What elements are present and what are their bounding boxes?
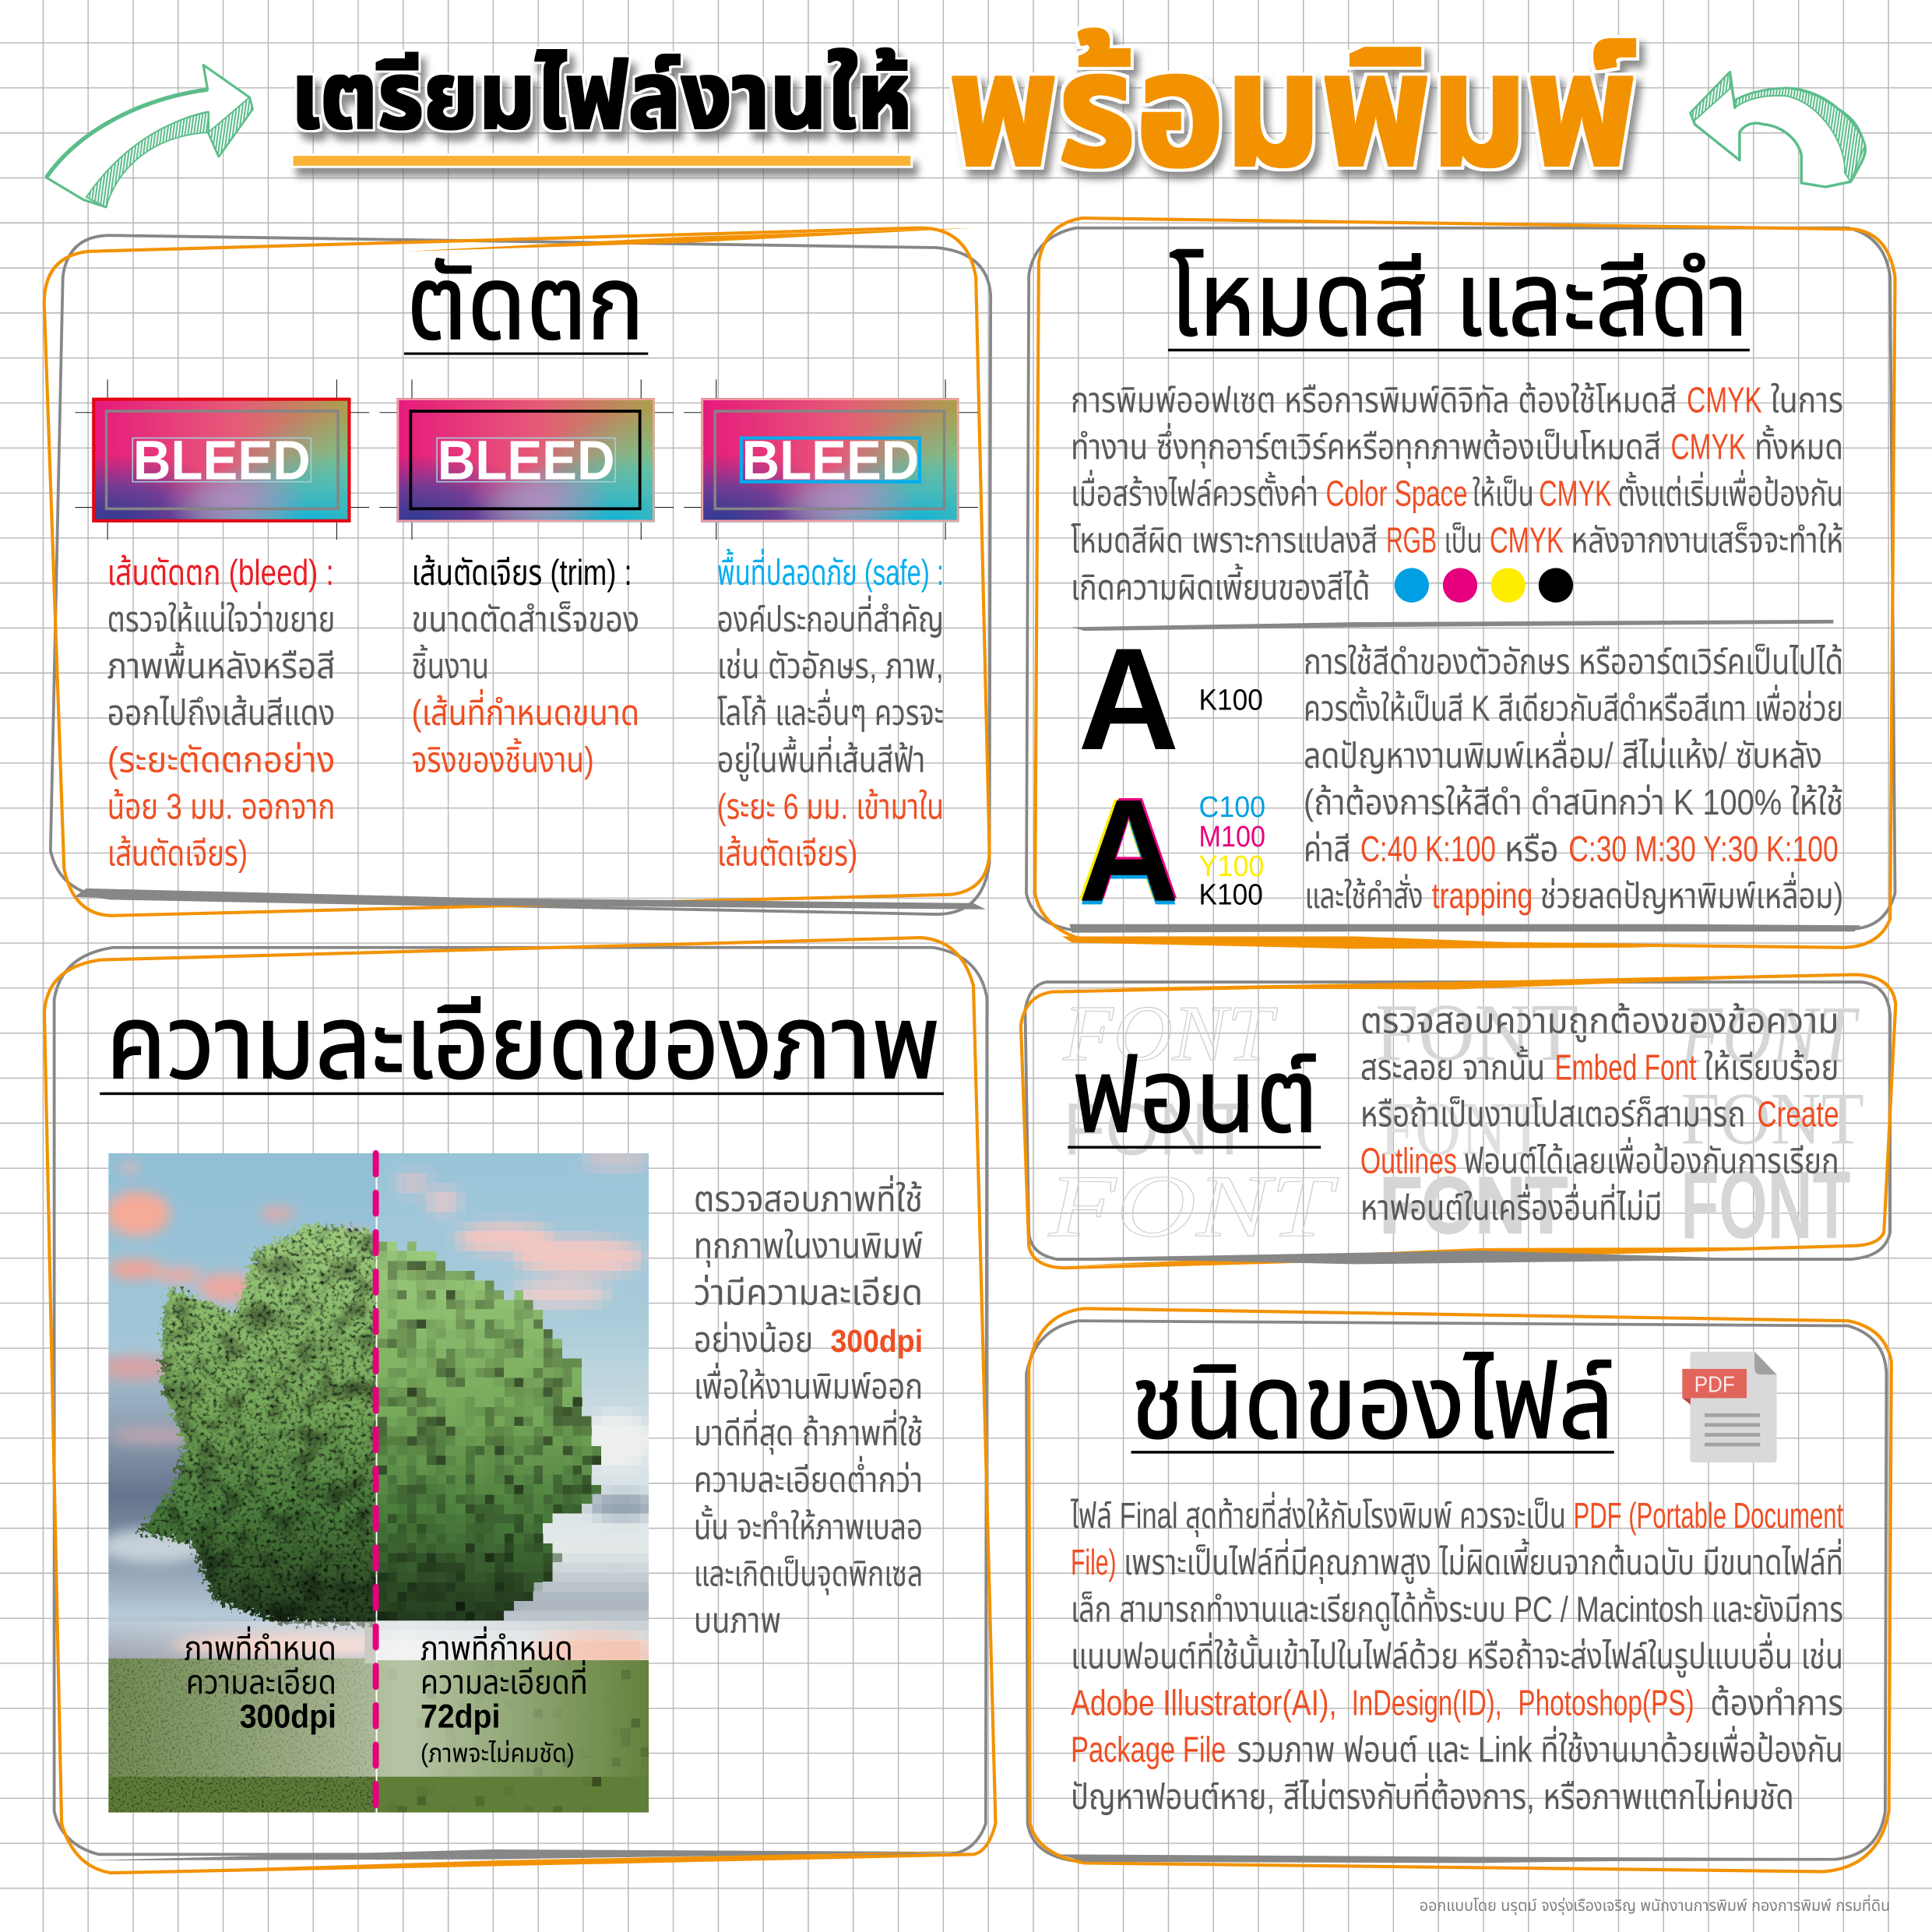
text: safe column	[717, 548, 944, 874]
text: colour mode paragraph: ทั้งหมด	[1754, 424, 1843, 466]
text: trim column: ชิ้นงาน	[411, 644, 489, 686]
decorative FONT specimens: FONT	[1680, 990, 1860, 1080]
text: resolution paragraph: ทุกภาพในงานพิมพ์	[694, 1225, 923, 1267]
caption: 72dpi: (ภาพจะไม่คมชัด)	[421, 1739, 575, 1768]
caption overlay band	[108, 1621, 649, 1777]
decorative FONT specimens: FONT	[1047, 1156, 1339, 1255]
text: file type paragraph: ปัญหาฟอนต์หาย, สีไม่ตรงกับที่ต้องการ, หรือภาพแตกไม่คมชัด	[1071, 1772, 1794, 1817]
title highlight: ready to print: พร้อมพิมพ์	[948, 20, 1636, 199]
text: bleed column: ตรวจให้แน่ใจว่าขยาย	[107, 599, 335, 639]
decorative FONT specimens	[1047, 987, 1864, 1259]
text: resolution paragraph: ความละเอียดต่ำกว่า	[694, 1455, 923, 1500]
caption: 72dpi: 72dpi	[421, 1698, 500, 1735]
panel: colour mode	[1026, 218, 1895, 948]
text: colour mode paragraph: การพิมพ์ออฟเซต หรือการพิมพ์ดิจิทัล ต้องใช้โหมดสี	[1071, 379, 1677, 420]
text: safe column: (ระยะ 6 มม. เข้ามาใน	[717, 786, 944, 826]
image half: sharp 300dpi	[99, 1153, 394, 1813]
text: colour mode paragraph: CMYK	[1490, 520, 1564, 561]
sample: CMYK rich black letter: A	[1078, 769, 1179, 932]
text: font paragraph: Embed Font	[1555, 1047, 1697, 1088]
panel frame	[1021, 975, 1895, 1268]
heading: ความละเอียดของภาพ	[106, 985, 940, 1100]
text: colour mode paragraph: ในการ	[1771, 379, 1843, 420]
text: bleed column: ออกไปถึงเส้นสีแดง	[107, 692, 335, 733]
icon: CMYK dots	[1395, 568, 1573, 603]
heading underline	[100, 1093, 944, 1095]
text: black ink paragraph: และใช้คำสั่ง	[1305, 874, 1423, 916]
text: colour mode paragraph: ให้เป็น	[1473, 473, 1534, 514]
text: file type paragraph: Adobe Illustrator(AI),	[1071, 1683, 1337, 1723]
text: bleed column: เส้นตัดเจียร)	[107, 833, 248, 874]
bleed card: trim line: BLEED	[438, 431, 615, 492]
text: trim column	[411, 552, 639, 779]
footer credit: ออกแบบโดย นรุตม์ จงรุ่งเรืองเจริญ พนักงานการพิมพ์ กองการพิมพ์ กรมที่ดิน	[1420, 1895, 1890, 1916]
decorative FONT specimens: FONT	[1380, 1161, 1568, 1249]
text: resolution paragraph: อย่างน้อย	[694, 1319, 813, 1360]
text: bleed column: (ระยะตัดตกอย่าง	[107, 739, 335, 779]
text: safe column: โลโก้ และอื่นๆ ควรจะ	[717, 688, 944, 733]
panel: fonts	[1021, 975, 1895, 1268]
panel frame	[44, 228, 991, 916]
icon: PDF file: PDF	[1694, 1372, 1735, 1397]
text: font paragraph: ให้เรียบร้อย	[1704, 1047, 1839, 1088]
text: black ink paragraph: (ถ้าต้องการให้สีดำ ดำสนิทกว่า K 100% ให้ใช้	[1304, 782, 1843, 822]
heading: ชนิดของไฟล์	[1131, 1346, 1614, 1461]
heading underline	[404, 353, 648, 355]
text: file type paragraph: File)	[1071, 1542, 1117, 1582]
heading underline	[1131, 1451, 1614, 1454]
text: resolution paragraph: นั้น จะทำให้ภาพเบลอ	[694, 1504, 923, 1547]
decorative FONT specimens: FONT	[1063, 1089, 1251, 1171]
text: trim column: ขนาดตัดสำเร็จของ	[411, 599, 639, 639]
sample: CMYK rich black letter: Y100	[1199, 850, 1264, 883]
text: colour mode paragraph: CMYK	[1671, 426, 1746, 466]
text: black ink paragraph: C:30 M:30 Y:30 K:100	[1568, 829, 1839, 869]
text: resolution paragraph: เพื่อให้งานพิมพ์ออก	[694, 1362, 923, 1406]
text: font paragraph: หรือถ้าเป็นงานโปสเตอร์ก็สามารถ	[1360, 1094, 1746, 1135]
text: black ink paragraph: ลดปัญหางานพิมพ์เหลื่อม/ สีไม่แห้ง/ ซับหลัง	[1304, 731, 1822, 776]
text: bleed column: ภาพพื้นหลังหรือสี	[107, 642, 335, 686]
text: font paragraph: หาฟอนต์ในเครื่องอื่นที่ไม่มี	[1360, 1183, 1662, 1227]
text: colour mode paragraph: เป็น	[1444, 520, 1482, 561]
text: file type paragraph	[1070, 1491, 1843, 1817]
caption: 300dpi: ความละเอียด	[186, 1664, 336, 1701]
heading: ตัดตก	[406, 246, 645, 361]
panel frame	[44, 938, 995, 1873]
text: colour mode paragraph: ทำงาน ซึ่งทุกอาร์ตเวิร์คหรือทุกภาพต้องเป็นโหมดสี	[1071, 422, 1661, 468]
image half: pixelated 72dpi	[364, 1146, 656, 1818]
bleed card: red line: BLEED	[133, 431, 311, 492]
heading: โหมดสี และสีดำ	[1170, 242, 1748, 357]
text: trim column: เส้นตัดเจียร (trim) :	[411, 552, 632, 593]
panel frame	[1026, 1308, 1892, 1871]
text: black ink paragraph: ค่าสี	[1304, 829, 1350, 869]
sample: CMYK rich black letter: A	[1078, 772, 1179, 935]
text: file type paragraph: InDesign(ID),	[1352, 1683, 1502, 1723]
text: colour mode paragraph: CMYK	[1687, 379, 1762, 420]
text: safe column: พื้นที่ปลอดภัย (safe) :	[717, 548, 944, 593]
text: font paragraph: ตรวจสอบความถูกต้องของข้อความ	[1360, 1001, 1839, 1043]
divider brush	[1072, 620, 1833, 631]
decorative FONT specimens: FONT	[1680, 1077, 1864, 1160]
text: font paragraph	[1360, 1001, 1839, 1227]
text: file type paragraph: ไฟล์ Final สุดท้ายที่ส่งให้กับโรงพิมพ์ ควรจะเป็น	[1070, 1491, 1566, 1537]
caption: 72dpi: ความละเอียดที่	[421, 1659, 588, 1701]
image: sharp and pixelated tree comparison	[99, 1146, 656, 1818]
text: colour mode paragraph: เกิดความผิดเพี้ยนของสีได้	[1071, 563, 1370, 607]
text: colour mode paragraph: Color Space	[1326, 473, 1467, 514]
panel: image resolution	[44, 938, 995, 1873]
bleed card: red line	[76, 379, 369, 540]
sample: CMYK rich black letter: M100	[1199, 821, 1265, 853]
text: resolution paragraph: และเกิดเป็นจุดพิกเซล	[694, 1553, 923, 1595]
sample: CMYK rich black letter: K100	[1199, 878, 1263, 911]
text: font paragraph: Outlines	[1360, 1140, 1457, 1181]
text: resolution paragraph: 300dpi	[830, 1323, 923, 1359]
bleed card: safe line: BLEED	[742, 431, 919, 492]
heading underline	[1068, 1146, 1321, 1149]
text: file type paragraph: Package File	[1071, 1730, 1226, 1770]
caption: 72dpi	[421, 1625, 588, 1768]
panel: bleed	[44, 228, 991, 916]
title	[290, 20, 1636, 199]
bleed card: trim line	[379, 379, 674, 540]
decorative FONT specimens: FONT	[1062, 990, 1278, 1077]
dashed divider	[374, 1153, 378, 1814]
sample: K100 letter	[1078, 618, 1263, 780]
text: font paragraph: ฟอนต์ได้เลยเพื่อป้องกันการเรียก	[1464, 1136, 1839, 1181]
text: black ink paragraph: ช่วยลดปัญหาพิมพ์เหลื่อม)	[1540, 871, 1843, 916]
text: resolution paragraph: ตรวจสอบภาพที่ใช้	[694, 1174, 923, 1219]
text: colour mode paragraph: หลังจากงานเสร็จจะทำให้	[1571, 520, 1843, 561]
text: bleed column: เส้นตัดตก (bleed) :	[107, 552, 334, 593]
text: black ink paragraph: trapping	[1432, 875, 1533, 916]
icon: left green arrow	[46, 65, 252, 207]
text: safe column: เช่น ตัวอักษร, ภาพ,	[717, 646, 944, 686]
text: black ink paragraph: หรือ	[1504, 829, 1559, 869]
decorative FONT specimens: FONT	[1380, 1088, 1545, 1172]
title underline	[294, 156, 910, 166]
sample: K100 letter: K100	[1199, 684, 1263, 716]
decorative FONT specimens: FONT	[1375, 987, 1578, 1078]
caption: 72dpi: ภาพที่กำหนด	[421, 1625, 573, 1667]
text: black ink paragraph: C:40 K:100	[1360, 829, 1496, 869]
text: colour mode paragraph: RGB	[1386, 520, 1437, 561]
text: colour mode paragraph: เมื่อสร้างไฟล์ควรตั้งค่า	[1071, 470, 1318, 514]
title line: prepare file: เตรียมไฟล์งานให้	[290, 44, 912, 149]
text: colour mode paragraph: ตั้งแต่เริ่มเพื่อป้องกัน	[1618, 470, 1843, 514]
panel frame	[1026, 218, 1895, 948]
text: safe column: อยู่ในพื้นที่เส้นสีฟ้า	[717, 735, 925, 781]
text: colour mode paragraph: โหมดสีผิด เพราะการแปลงสี	[1071, 520, 1378, 561]
text: trim column: (เส้นที่กำหนดขนาด	[411, 688, 639, 733]
sample: CMYK rich black letter: C100	[1199, 791, 1265, 824]
text: font paragraph: สระลอย จากนั้น	[1360, 1045, 1545, 1088]
text: resolution paragraph: บนภาพ	[694, 1600, 781, 1641]
panel: file type	[1026, 1308, 1892, 1871]
sample: CMYK rich black letter	[1075, 766, 1265, 935]
text: colour mode paragraph: CMYK	[1539, 473, 1612, 514]
text: trim column: จริงของชิ้นงาน)	[411, 737, 594, 779]
text: bleed column	[107, 552, 335, 874]
text: resolution paragraph: ว่ามีความละเอียด	[694, 1272, 923, 1313]
text: resolution paragraph: มาดีที่สุด ถ้าภาพที่ใช้	[694, 1409, 923, 1455]
heading underline	[1168, 349, 1750, 351]
caption: 300dpi	[185, 1625, 336, 1735]
text: safe column: องค์ประกอบที่สำคัญ	[717, 595, 944, 639]
bleed card: safe line	[684, 379, 978, 540]
sample: K100 letter: A	[1078, 618, 1179, 780]
caption: 300dpi: ภาพที่กำหนด	[185, 1625, 336, 1667]
text: bleed column: น้อย 3 มม. ออกจาก	[107, 786, 335, 826]
sample: CMYK rich black letter: A	[1075, 768, 1177, 931]
caption: 300dpi: 300dpi	[240, 1698, 336, 1735]
text: black ink paragraph	[1304, 642, 1843, 916]
text: safe column: เส้นตัดเจียร)	[717, 833, 857, 874]
text: file type paragraph: Photoshop(PS)	[1518, 1683, 1694, 1723]
text: resolution paragraph	[694, 1174, 923, 1641]
heading: ฟอนต์	[1072, 1039, 1318, 1154]
text: font paragraph: Create	[1757, 1094, 1839, 1135]
sample: CMYK rich black letter: A	[1081, 766, 1181, 929]
icon: PDF file	[1682, 1352, 1777, 1462]
text: colour mode paragraph	[1071, 379, 1843, 607]
icon: right green arrow	[1691, 72, 1865, 187]
text: file type paragraph: ต้องทำการ	[1710, 1683, 1843, 1723]
